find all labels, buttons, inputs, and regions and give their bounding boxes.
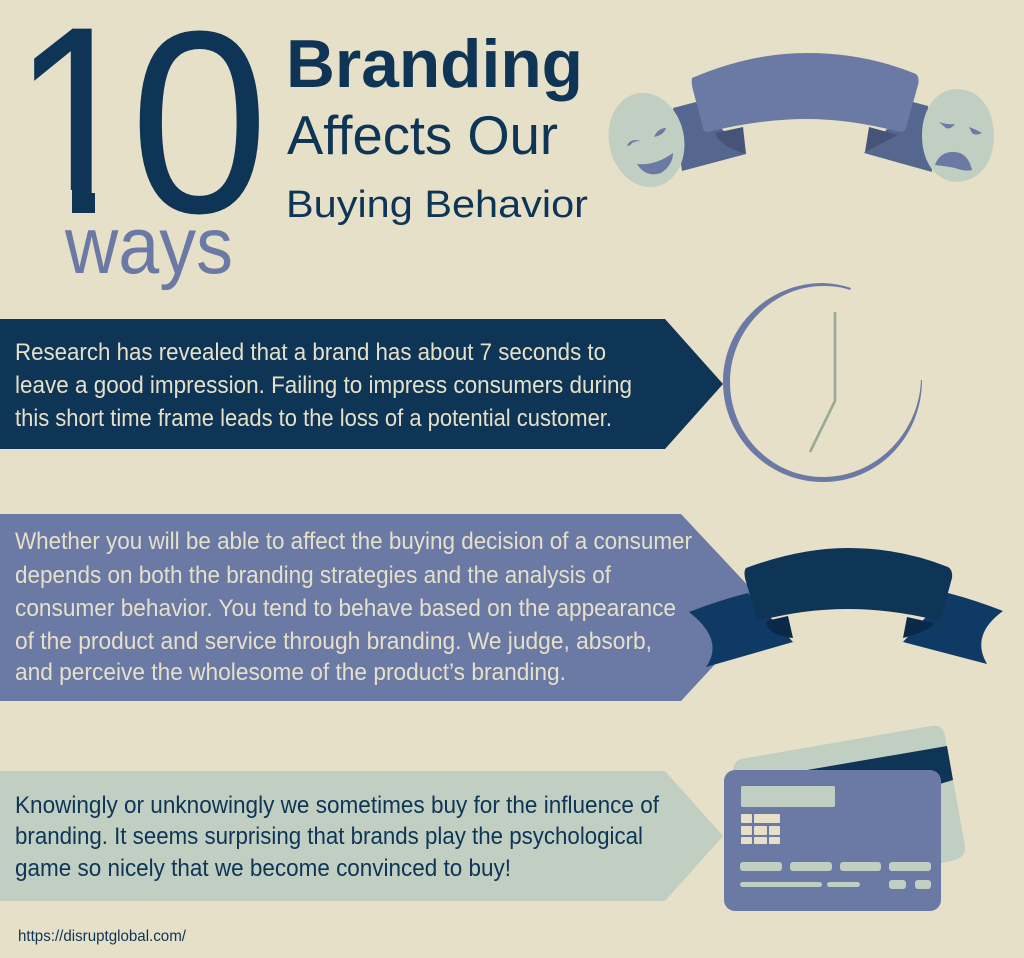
panel text: Knowingly or unknowingly we sometimes buy for the influence of: [15, 792, 659, 819]
ribbon main band: [692, 53, 919, 132]
icon: credit cards: [724, 726, 965, 911]
panel text: leave a good impression. Failing to impress consumers during: [15, 372, 632, 399]
clock ring: [723, 283, 922, 482]
big number 10: [34, 28, 259, 214]
chip: [741, 814, 780, 844]
word: ways: ways: [64, 201, 233, 291]
panel shape: [0, 319, 723, 449]
panel text: [15, 528, 692, 686]
right tragedy mask: [922, 89, 994, 182]
card number bars: [740, 862, 931, 889]
panel: seven seconds: [0, 319, 723, 449]
panel text: Whether you will be able to affect the buying decision of a consumer: [15, 528, 692, 555]
heading: Branding: Branding: [286, 26, 583, 102]
signature strip: [741, 786, 835, 807]
clock hands: [810, 312, 835, 452]
icon: clock: [723, 283, 922, 482]
left ribbon tail: [689, 593, 793, 667]
title: [34, 28, 588, 290]
panel text: [15, 339, 632, 432]
panel text: consumer behavior. You tend to behave based on the appearance: [15, 595, 676, 622]
right ribbon tail: [864, 102, 932, 172]
panel text: and perceive the wholesome of the product’s branding.: [15, 659, 566, 686]
icon: ribbon with theatre masks: [600, 53, 994, 194]
source link: https://disruptglobal.com/: [18, 928, 187, 945]
icon: navy ribbon: [689, 548, 1003, 667]
panel text: Research has revealed that a brand has about 7 seconds to: [15, 339, 606, 366]
heading: Buying Behavior: Buying Behavior: [286, 184, 588, 226]
panel text: branding. It seems surprising that brands play the psychological: [15, 823, 643, 850]
left comedy mask: [600, 86, 693, 194]
panel text: depends on both the branding strategies and the analysis of: [15, 562, 611, 589]
ribbon folds: [715, 127, 898, 154]
right ribbon tail: [903, 593, 1003, 664]
panel: buying decision: [0, 514, 768, 701]
back card: [733, 726, 965, 868]
left ribbon tail: [673, 102, 746, 171]
panel text: this short time frame leads to the loss of a potential customer.: [15, 405, 612, 432]
panel shape: [0, 514, 768, 701]
panel: influence of branding: [0, 771, 723, 901]
panel text: [15, 792, 659, 882]
panel text: game so nicely that we become convinced to buy!: [15, 855, 511, 882]
ribbon main band: [744, 548, 952, 620]
front card: [724, 770, 941, 911]
panel shape: [0, 771, 723, 901]
back card stripe: [807, 746, 953, 790]
heading: Affects Our: Affects Our: [287, 104, 558, 166]
panel text: of the product and service through branding. We judge, absorb,: [15, 628, 652, 655]
ribbon folds: [766, 616, 934, 638]
